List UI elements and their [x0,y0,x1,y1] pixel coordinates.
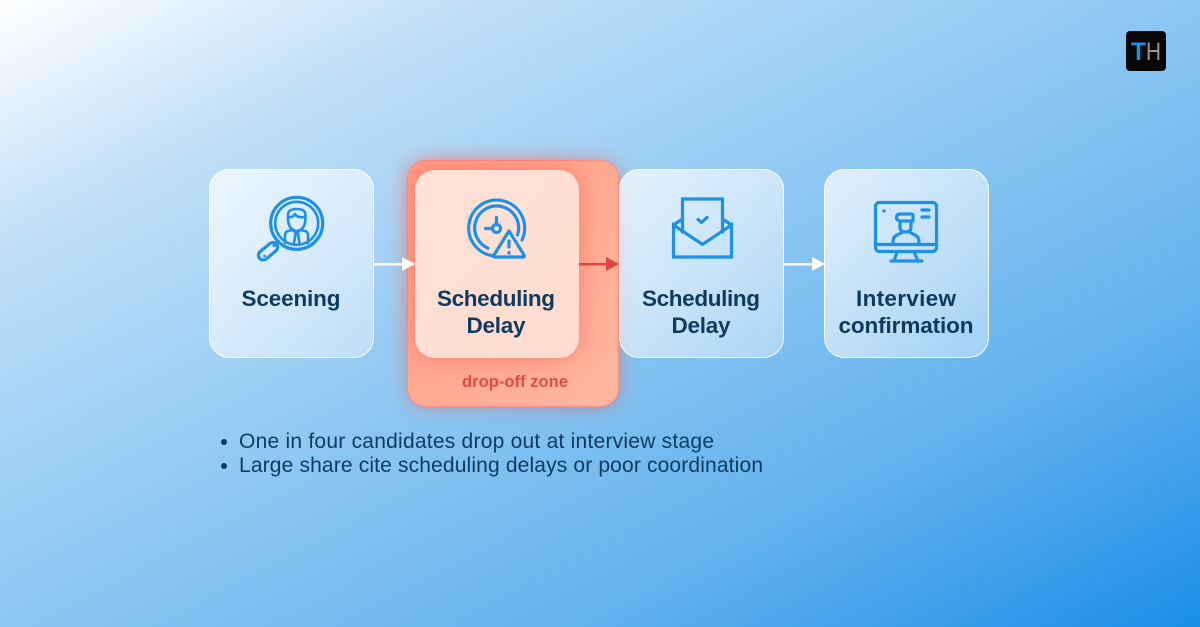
icon: clock with warning [469,200,525,257]
logo: T [1131,38,1146,66]
arrow: envelope to confirmation [784,257,825,271]
drop-off zone label: drop-off zone [462,373,568,391]
label: Scheduling Delay: Delay [466,313,526,338]
panel: interview confirmation [824,170,988,358]
icon: magnifier over candidate [257,197,323,262]
panel: scheduling delay (highlighted) [415,170,579,358]
icon: envelope with letter [674,199,732,257]
bullet list [221,430,763,477]
label: Interview confirmation: confirmation [838,313,974,338]
arrow: scheduling to envelope (red) [579,257,619,271]
label: Scheduling Delay [437,286,555,338]
icon: video interview monitor [876,202,936,261]
logo: H [1146,38,1161,66]
label: Sceening: Sceening [242,286,340,311]
logo [1126,31,1166,71]
label: Scheduling Delay [642,286,760,338]
bullet list: One in four candidates drop out at interview stage [239,430,714,453]
bullet list: Large share cite scheduling delays or poor coordination [239,454,763,477]
label: Scheduling Delay: Delay [672,313,731,338]
panel: scheduling delay (confirmation envelope) [620,170,784,358]
panel: drop-off zone [407,160,619,407]
label: Interview confirmation: Interview [856,286,956,311]
label: Interview confirmation [838,286,974,338]
label: Scheduling Delay: Scheduling [437,286,555,311]
label: Scheduling Delay: Scheduling [642,286,760,311]
arrow: screening to scheduling [374,257,415,271]
panel: screening [210,170,374,358]
